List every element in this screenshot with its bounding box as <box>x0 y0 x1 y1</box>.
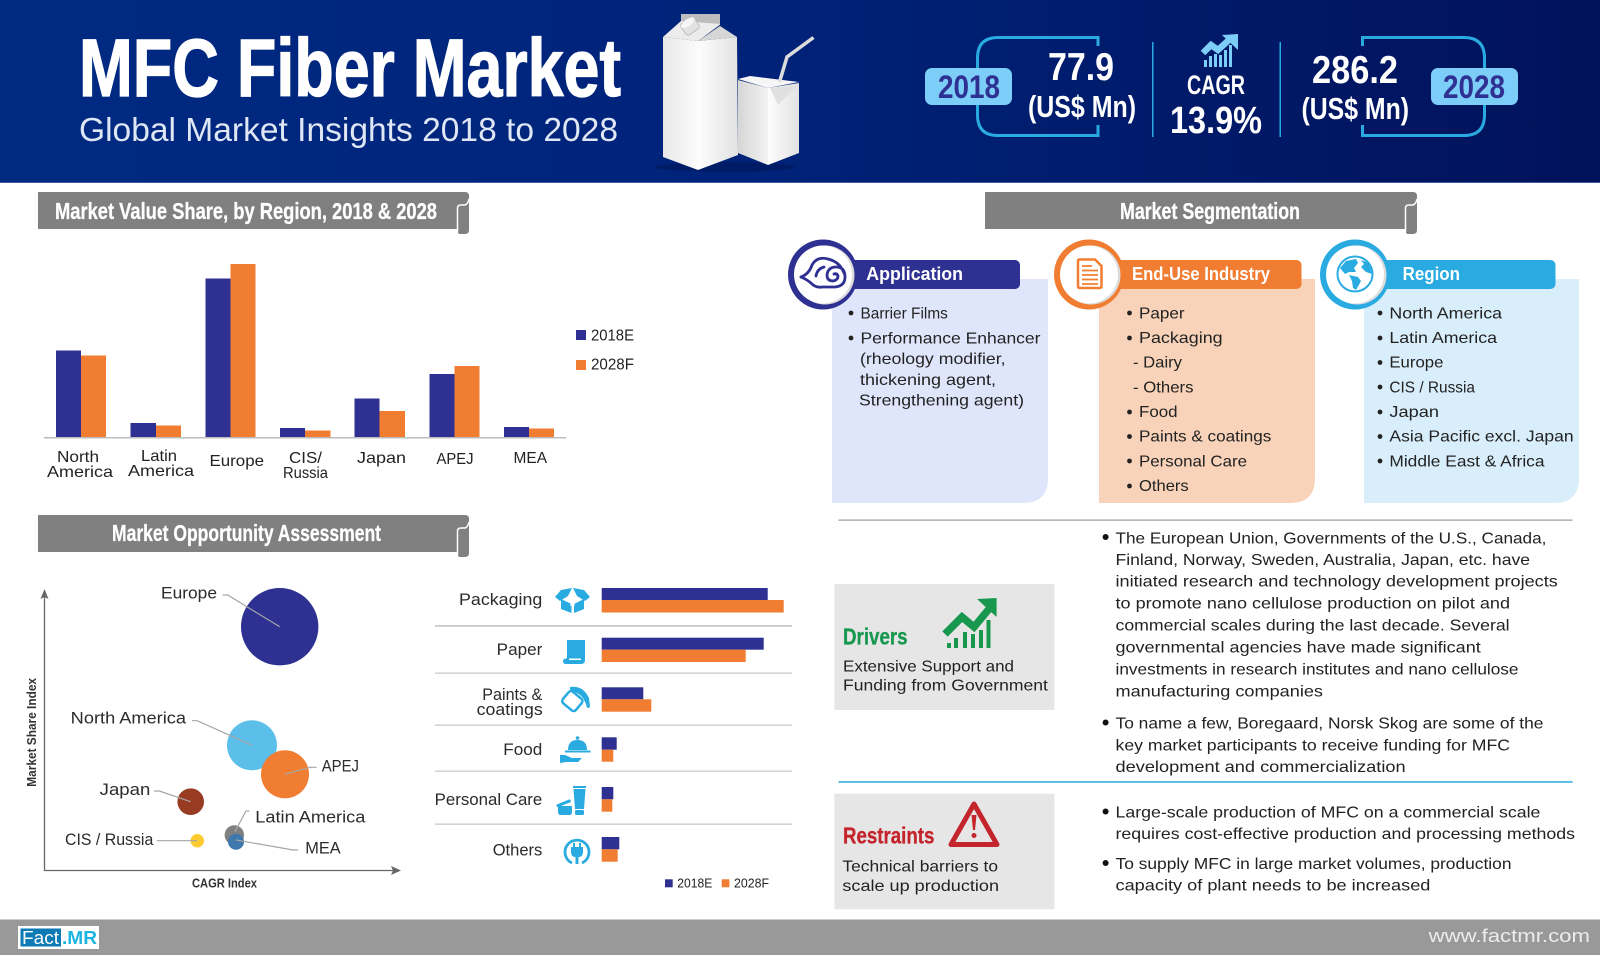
icon: packaging box <box>555 588 590 613</box>
axis labels: Europe <box>210 453 264 470</box>
heading: market segmentation <box>985 192 1417 234</box>
list: application items: Performance Enhancer <box>860 330 1041 347</box>
text block: restraints detail: To supply MFC in large market volumes, production <box>1116 856 1512 873</box>
horizontal bar chart: end-use industry <box>435 588 792 891</box>
header banner <box>0 0 1600 183</box>
axis titles: Market Share Index <box>24 677 39 787</box>
logo: Fact <box>22 928 59 948</box>
axis labels <box>47 448 547 482</box>
row labels: Food <box>503 741 542 759</box>
list: end-use items: Packaging <box>1139 330 1223 347</box>
axis labels: America <box>47 464 113 481</box>
list: application items: (rheology modifier, <box>860 351 1006 368</box>
icon: document <box>1078 260 1102 288</box>
heading: market opportunity assessment: Market Opportunity Assessment <box>112 520 381 546</box>
heading: market value share <box>38 192 469 234</box>
row labels <box>435 591 543 860</box>
icon: milk cartons <box>655 14 814 172</box>
list: region items: Asia Pacific excl. Japan <box>1389 429 1574 446</box>
stat: 2018 value <box>925 38 1136 136</box>
panel: application <box>788 240 1048 503</box>
axis labels: America <box>128 463 194 480</box>
stat: 2028 value: 2028 <box>1443 69 1505 105</box>
bubble labels: MEA <box>305 839 341 857</box>
stat: 2018 value: (US$ Mn) <box>1028 89 1136 124</box>
icon: globe <box>1338 256 1372 292</box>
stat: 2028 value: 286.2 <box>1312 49 1398 92</box>
heading: market opportunity assessment <box>38 515 469 557</box>
axis labels: Japan <box>357 450 406 467</box>
panel: region <box>1320 240 1579 503</box>
axis titles <box>24 677 258 891</box>
axis titles: CAGR Index <box>192 876 258 891</box>
panel: drivers: Extensive Support and <box>843 659 1014 676</box>
list: end-use items: Food <box>1139 404 1178 421</box>
logo: .MR <box>62 928 97 948</box>
legend: 2018E <box>677 877 712 891</box>
icon: growth chart <box>1203 34 1238 67</box>
text block: drivers detail: Finland, Norway, Sweden, Australia, Japan, etc. have <box>1116 552 1530 569</box>
bars <box>602 588 784 862</box>
heading: market value share: Market Value Share, by Region, 2018 & 2028 <box>55 198 437 224</box>
leader lines <box>154 595 317 850</box>
text block: restraints detail: requires cost-effective production and processing methods <box>1116 826 1575 843</box>
icon: food cloche <box>560 736 590 763</box>
bubble chart: market opportunity <box>24 584 401 891</box>
logo <box>18 926 99 949</box>
bubble labels: CIS / Russia <box>65 831 154 849</box>
list: end-use items: Personal Care <box>1139 453 1247 470</box>
heading: market segmentation: Market Segmentation <box>1120 198 1300 224</box>
text block: drivers detail <box>1103 530 1558 776</box>
row labels: coatings <box>477 701 543 719</box>
panel: end-use industry <box>1054 240 1315 503</box>
divider: drivers and restraints <box>838 781 1572 783</box>
axis labels: MEA <box>514 450 547 467</box>
list: region items: Europe <box>1389 355 1444 372</box>
stat: 2028 value <box>1302 38 1518 136</box>
axis labels: CIS/ <box>289 450 323 467</box>
bubble labels: North America <box>71 709 187 727</box>
text block: drivers detail: development and commercialization <box>1116 759 1406 776</box>
bubbles <box>177 588 318 850</box>
axis labels: North <box>57 449 99 466</box>
axis labels: APEJ <box>436 451 474 468</box>
bubble labels <box>65 584 366 857</box>
row labels: Paints & <box>482 686 542 704</box>
list: region items: Middle East & Africa <box>1389 453 1545 470</box>
text block: drivers detail: to promote nano cellulose production on pilot and <box>1116 596 1510 613</box>
icon: fibre swirl <box>801 258 845 287</box>
panel: region: Region <box>1403 264 1460 284</box>
legend <box>576 328 634 374</box>
footer bar <box>0 920 1600 955</box>
title: MFC Fiber Market <box>79 23 621 114</box>
text block: restraints detail: Large-scale production of MFC on a commercial scale <box>1116 804 1541 821</box>
text block: restraints detail: capacity of plant needs to be increased <box>1116 878 1430 895</box>
panel: application: Application <box>866 264 963 284</box>
list: region items <box>1378 305 1574 470</box>
axis labels: Russia <box>283 465 328 482</box>
text block: drivers detail: initiated research and technology development projects <box>1116 574 1558 591</box>
list: region items: CIS / Russia <box>1389 379 1475 396</box>
legend <box>665 877 769 891</box>
bubble labels: Europe <box>161 584 217 602</box>
bubble labels: APEJ <box>322 758 359 776</box>
icon: plug <box>565 840 589 864</box>
text block: drivers detail: manufacturing companies <box>1116 683 1323 700</box>
website: www.factmr.com <box>1427 926 1590 946</box>
bubble labels: Japan <box>100 781 150 799</box>
list: end-use items: - Dairy <box>1133 355 1182 372</box>
panel: restraints: Restraints <box>843 823 934 849</box>
list: application items: Barrier Films <box>860 305 948 322</box>
stat: CAGR: CAGR <box>1187 70 1245 100</box>
list: region items: Japan <box>1389 404 1439 421</box>
row labels: Others <box>493 842 542 860</box>
list: end-use items: Others <box>1139 478 1189 495</box>
icon: green growth chart <box>945 598 997 648</box>
icon: paint bucket <box>561 687 590 712</box>
row dividers <box>435 625 792 825</box>
list: end-use items: - Others <box>1133 379 1194 396</box>
text block: drivers detail: To name a few, Boregaard, Norsk Skog are some of the <box>1116 715 1544 732</box>
row labels: Paper <box>497 641 543 659</box>
text block: restraints detail <box>1103 804 1575 895</box>
stat: 2028 value: (US$ Mn) <box>1302 91 1409 126</box>
stat: 2018 value: 2018 <box>938 69 1000 105</box>
axis labels: Latin <box>141 448 177 465</box>
list: application items: Strengthening agent) <box>859 393 1024 410</box>
panel: restraints: scale up production <box>842 878 999 895</box>
list: end-use items <box>1127 305 1271 495</box>
panel: drivers: Drivers <box>843 623 908 649</box>
panel: restraints: Technical barriers to <box>842 859 998 876</box>
list: end-use items: Paints & coatings <box>1139 429 1271 446</box>
text block: drivers detail: key market participants to receive funding for MFC <box>1116 737 1510 754</box>
list: region items: North America <box>1389 305 1502 322</box>
row labels: Personal Care <box>435 791 542 809</box>
text block: drivers detail: The European Union, Governments of the U.S., Canada, <box>1116 530 1546 547</box>
text block: drivers detail: governmental agencies have made significant <box>1116 639 1481 656</box>
list: application items: thickening agent, <box>860 372 996 389</box>
legend: 2028F <box>591 356 634 374</box>
stat: CAGR <box>1152 34 1281 142</box>
list: region items: Latin America <box>1389 330 1497 347</box>
icon: warning triangle <box>951 804 997 844</box>
legend: 2018E <box>591 328 634 344</box>
stat: 2018 value: 77.9 <box>1048 46 1114 89</box>
icon: paper roll <box>563 640 585 664</box>
subtitle: Global Market Insights 2018 to 2028 <box>79 111 618 148</box>
icon: personal care <box>556 786 586 815</box>
text block: drivers detail: investments in research institutes and nano cellulose <box>1116 661 1519 678</box>
axes <box>40 589 401 875</box>
panel: drivers <box>834 584 1054 710</box>
legend: 2028F <box>734 877 769 891</box>
bubble labels: Latin America <box>255 809 366 827</box>
stat: CAGR: 13.9% <box>1170 100 1262 142</box>
divider: segmentation and drivers <box>838 520 1572 521</box>
panel: drivers: Funding from Government <box>843 678 1049 695</box>
row labels: Packaging <box>459 591 542 609</box>
panel: restraints <box>834 794 1054 909</box>
list: application items <box>849 305 1041 410</box>
text block: drivers detail: commercial scales during the last decade. Several <box>1116 617 1510 634</box>
panel: end-use industry: End-Use Industry <box>1132 264 1270 284</box>
list: end-use items: Paper <box>1139 305 1185 322</box>
bar chart: market value share by region <box>44 264 634 482</box>
